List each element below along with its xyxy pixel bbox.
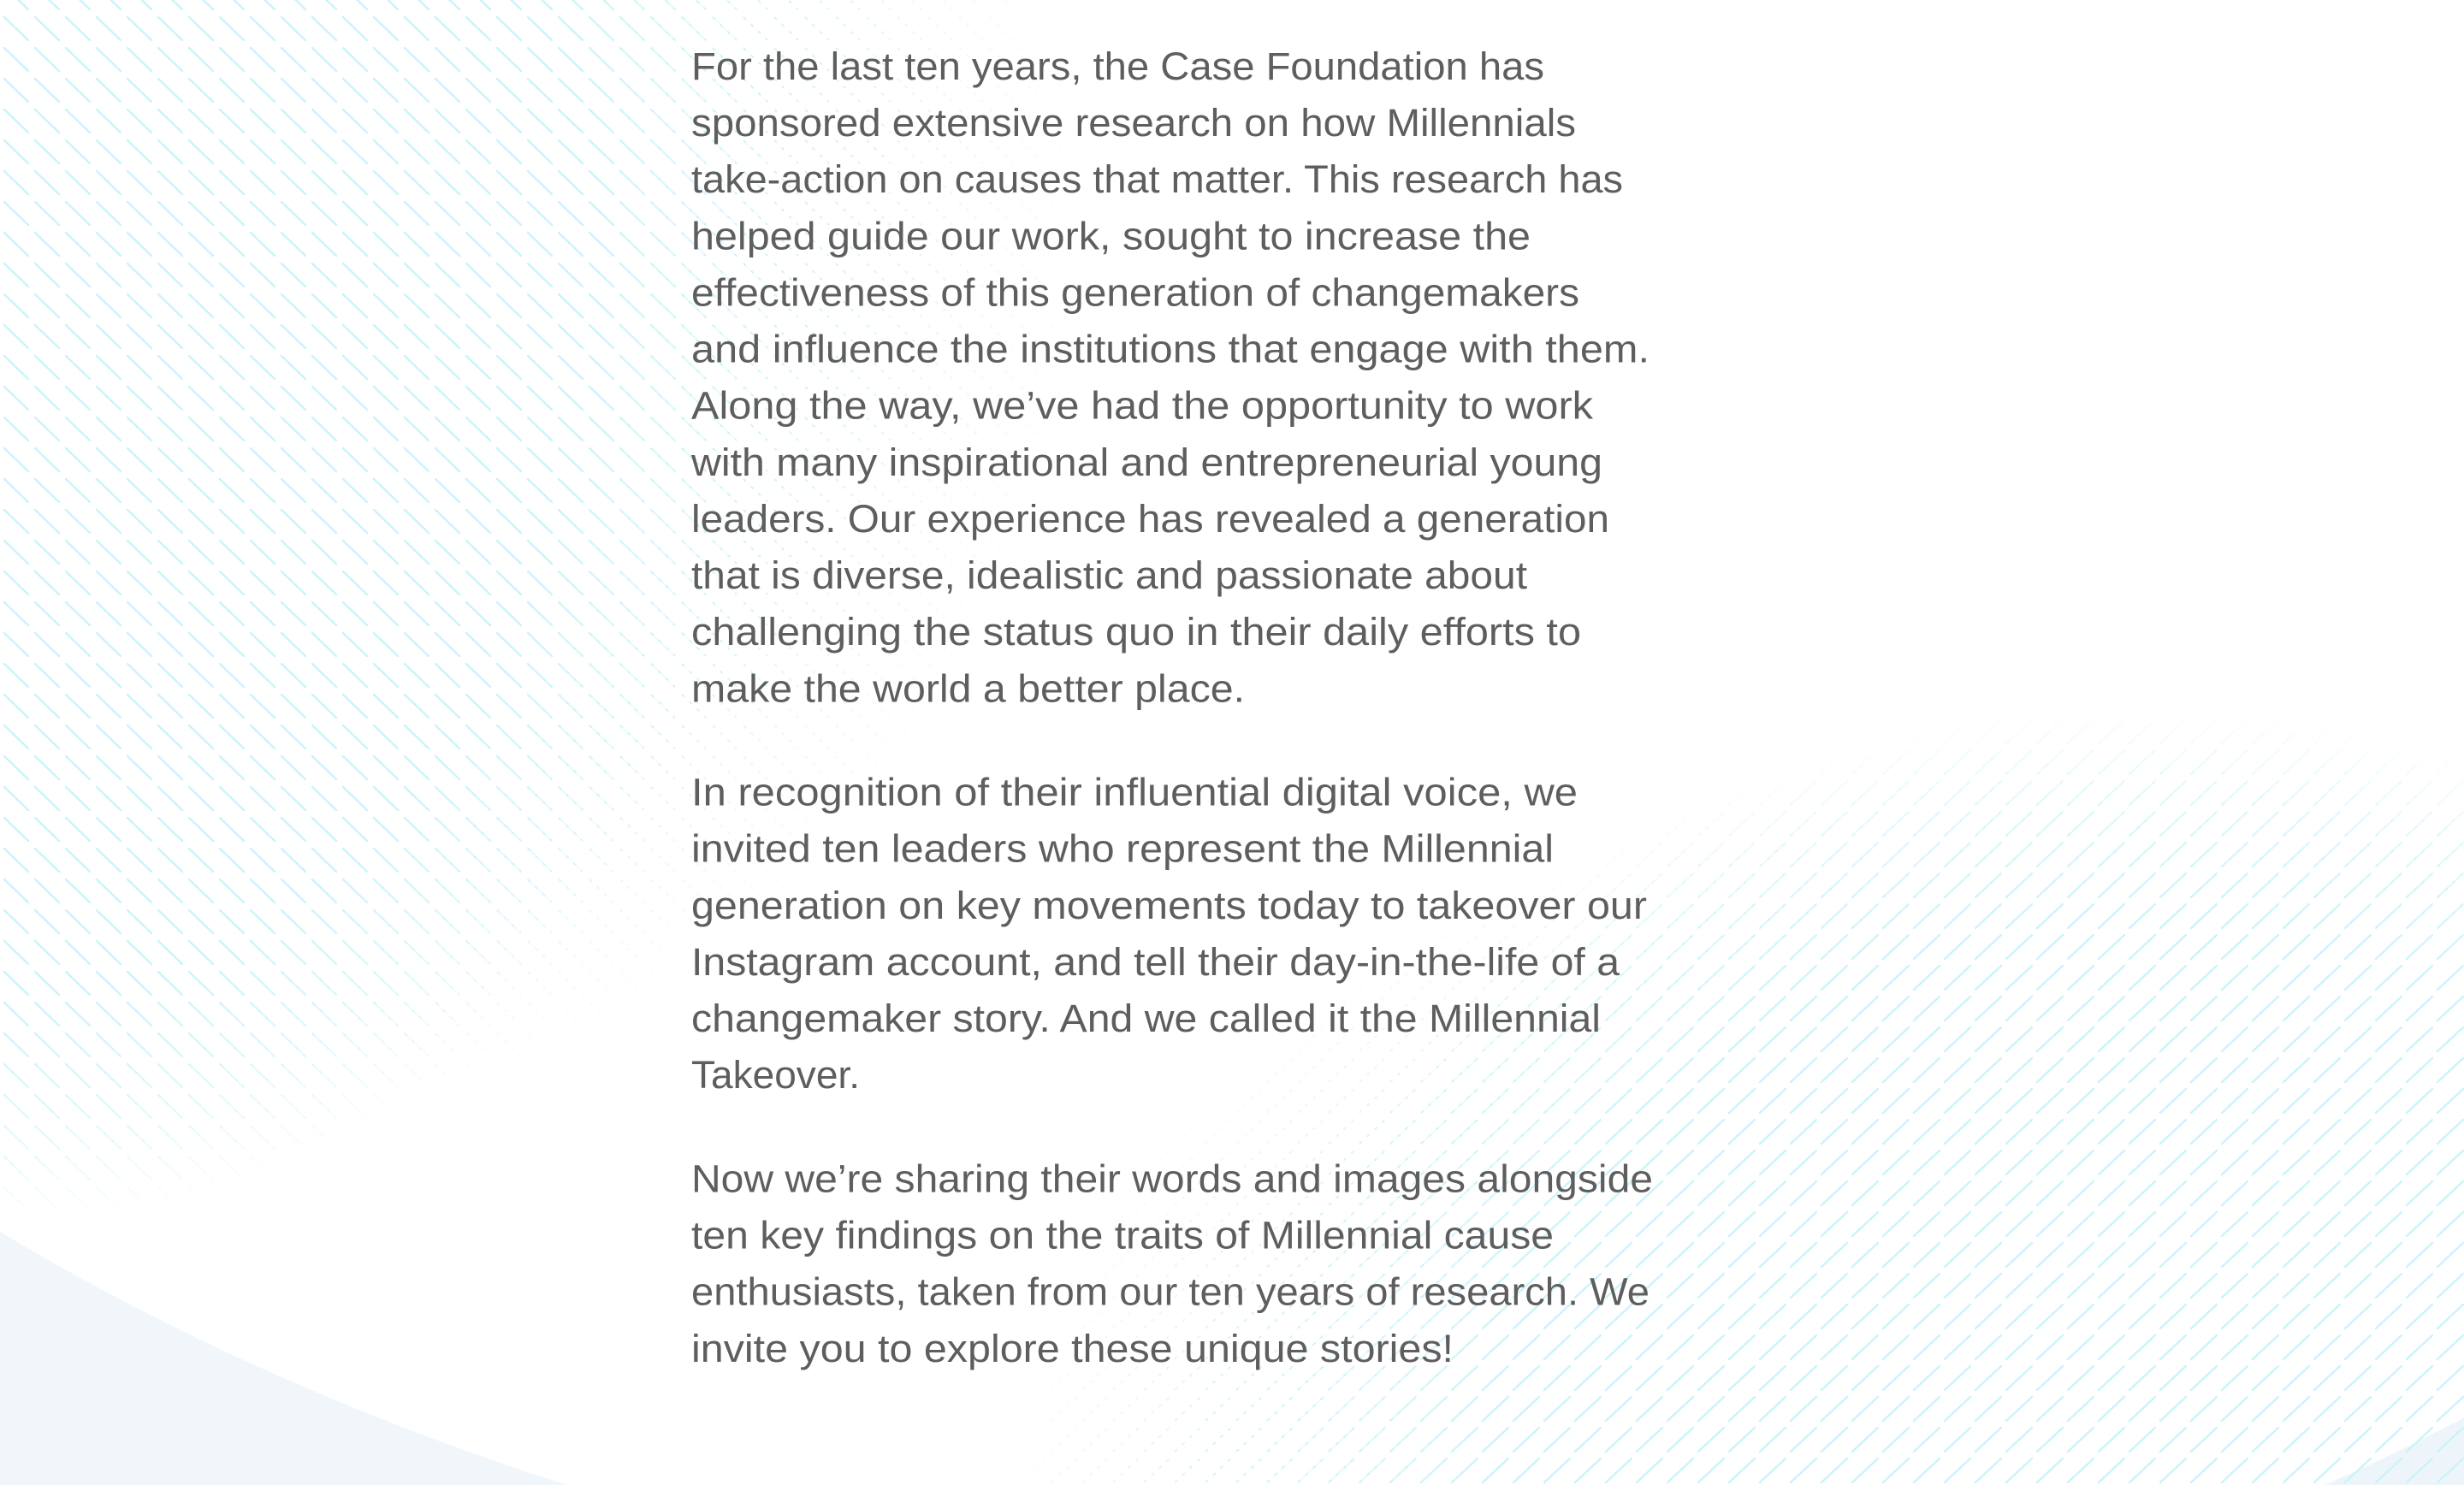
text block: first paragraph: challenging the status quo in their daily efforts to (691, 610, 1581, 654)
text block: third paragraph: ten key findings on the traits of Millennial cause (691, 1213, 1554, 1257)
text block: first paragraph: make the world a better place. (691, 666, 1245, 710)
text block: first paragraph: effectiveness of this generation of changemakers (691, 270, 1579, 315)
text block: second paragraph: changemaker story. And we called it the Millennial (691, 997, 1601, 1040)
text block: first paragraph: helped guide our work, sought to increase the (691, 214, 1531, 257)
text block: third paragraph: Now we’re sharing their words and images alongside (691, 1157, 1653, 1200)
text block: first paragraph: For the last ten years, the Case Foundation has (691, 44, 1544, 88)
text block: first paragraph (690, 44, 1650, 710)
text block: first paragraph: that is diverse, idealistic and passionate about (691, 553, 1528, 597)
corner shape: bottom right (2325, 1417, 2464, 1485)
text block: first paragraph: take-action on causes that matter. This research has (691, 157, 1623, 201)
text block: second paragraph: Instagram account, and tell their day-in-the-life of a (691, 940, 1620, 984)
text block: first paragraph: leaders. Our experience has revealed a generation (691, 497, 1609, 541)
text block: second paragraph: invited ten leaders who represent the Millennial (691, 827, 1554, 871)
text block: second paragraph: Takeover. (691, 1053, 860, 1097)
text block: first paragraph: with many inspirational and entrepreneurial young (690, 441, 1602, 484)
corner shape: bottom left (0, 1232, 567, 1485)
text block: first paragraph: Along the way, we’ve had the opportunity to work (691, 384, 1594, 428)
text block: second paragraph (691, 771, 1647, 1097)
text block: first paragraph: and influence the institutions that engage with them. (691, 328, 1650, 371)
text block: second paragraph: In recognition of their influential digital voice, we (691, 771, 1578, 814)
text block: second paragraph: generation on key movements today to takeover our (691, 884, 1647, 927)
text block: third paragraph: enthusiasts, taken from our ten years of research. We (691, 1270, 1650, 1314)
text block: third paragraph: invite you to explore these unique stories! (691, 1327, 1454, 1370)
text block: first paragraph: sponsored extensive research on how Millennials (691, 101, 1576, 145)
text block: third paragraph (691, 1157, 1653, 1370)
